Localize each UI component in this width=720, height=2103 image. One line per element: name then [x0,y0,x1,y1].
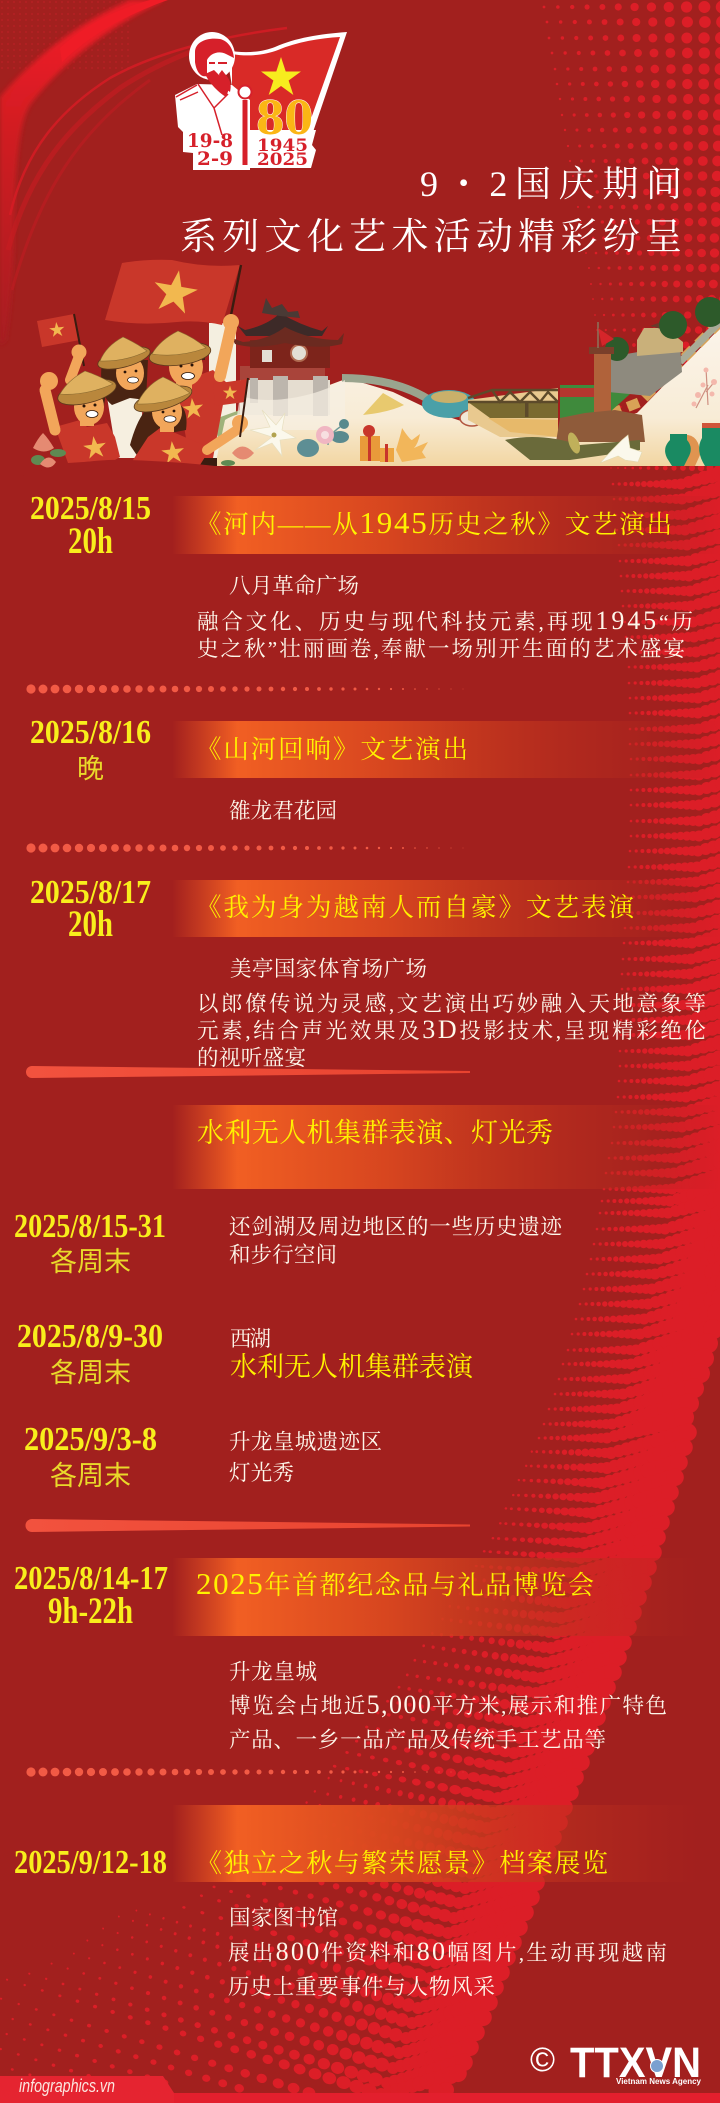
date [30,874,151,945]
divider [26,1767,463,1777]
logo: 80th anniversary emblem: 19-8 [187,130,233,152]
banner [172,496,720,554]
schedule row: Thang Long: 升龙皇城遗迹区 [229,1430,382,1454]
description: 雒龙君花园 [229,799,337,823]
schedule row: Thang Long: 2025/9/3-8 [24,1421,157,1458]
person: boy with raised fist [40,371,120,463]
event 6: archive exhibition [14,1805,720,1999]
description: 八月革命广场 [229,574,359,598]
description: 的视听盛宴 [197,1046,306,1070]
gifts, conical hat and lotus [360,390,484,462]
banner [172,1558,720,1636]
event 2: echoes of mountains and rivers [30,714,720,823]
schedule row: Hoan Kiem: 2025/8/15-31 [14,1208,166,1245]
divider [26,843,463,853]
date [30,714,151,784]
schedule row: Hoan Kiem: 各周末 [50,1247,131,1277]
schedule row: Hoan Kiem: 和步行空间 [229,1243,337,1267]
schedule row: Thang Long [24,1421,382,1491]
schedule row: Thang Long: 各周末 [50,1461,131,1491]
lily and lotus flowers [250,410,349,457]
person: man with raised flag [148,314,239,466]
person: girl in front [130,377,248,465]
banner [172,1105,720,1189]
heading: 水利无人机集群表演、灯光秀 [197,1118,553,1148]
date [14,1560,168,1632]
date: 2025/8/17 [30,874,151,911]
pagoda [232,298,345,430]
description: 博览会占地近5,000平方米,展示和推广特色 [229,1690,667,1719]
illustration: flag-waving crowd [22,260,260,480]
divider [26,1066,470,1078]
footer band [0,2076,720,2103]
description: 史之秋”壮丽画卷,奉献一场别开生面的艺术盛宴 [197,637,685,661]
date: 2025/8/15 [30,490,151,527]
schedule row: Hoan Kiem [14,1208,562,1277]
description: 产品、一乡一品产品及传统手工艺品等 [229,1728,606,1752]
date: 2025/8/14-17 [14,1560,168,1597]
banner [172,880,720,937]
schedule row: Hoan Kiem: 还剑湖及周边地区的一些历史遗迹 [229,1215,562,1239]
title [180,164,682,258]
description: 升龙皇城 [229,1660,317,1684]
description [197,957,706,1070]
logo: 80th anniversary emblem: 1945 [257,136,308,156]
description: 展出800件资料和80幅图片,生动再现越南 [228,1937,667,1966]
description: 融合文化、历史与现代科技元素,再现1945“历 [197,606,693,635]
logo: TTXVN copyright: © [530,2041,555,2079]
schedule row: West Lake [17,1318,475,1388]
schedule row: Thang Long: 灯光秀 [229,1461,294,1485]
banner [172,1805,720,1882]
date: 2025/9/12-18 [14,1844,167,1881]
red wave below crowd [22,460,260,480]
description [229,1660,667,1752]
logo: 80th anniversary emblem [175,32,347,170]
schedule row: West Lake: 2025/8/9-30 [17,1318,163,1355]
date: 晚 [77,754,104,784]
description: 国家图书馆 [229,1906,338,1930]
event 3: proud to be Vietnamese [30,874,720,1070]
event 1: Hanoi from autumn 1945 [30,490,720,661]
small flag right [213,378,248,437]
schedule row: West Lake: 水利无人机集群表演 [230,1352,475,1382]
event 4: water drone shows and light shows [14,1105,720,1491]
top-left red swooshes [0,0,287,345]
description: 元素,结合声光效果及3D投影技术,呈现精彩绝伦 [197,1015,706,1044]
date: 2025/8/16 [30,714,151,751]
small flag left [37,314,84,366]
heading: 《独立之秋与繁荣愿景》档案展览 [196,1849,608,1878]
heading: 2025年首都纪念品与礼品博览会 [196,1566,594,1601]
divider [26,684,463,694]
date: 20h [68,904,113,945]
description: 美亭国家体育场广场 [230,957,427,981]
schedule row: West Lake: 西湖 [230,1327,271,1351]
heading: 《我为身为越南人而自豪》文艺表演 [196,893,636,922]
person: woman in ao dai [70,337,152,458]
source link: infographics.vn [19,2076,115,2096]
title: 系列文化艺术活动精彩纷呈 [180,216,682,258]
pink lotus flowers and leaves [31,433,254,468]
banner illustration: landscape [209,297,720,466]
title: 9・2国庆期间 [420,164,682,204]
schedule row: West Lake: 各周末 [50,1358,131,1388]
date [30,490,151,562]
logo: 80th anniversary emblem: 2-9 [197,148,233,170]
bridge [468,388,558,437]
description [197,574,693,661]
logo: 80th anniversary emblem: 80 [256,91,313,145]
logo: 80th anniversary emblem: 2025 [257,150,308,170]
divider [26,1519,470,1532]
logo: TTXVN copyright: Vietnam News Agency [616,2076,701,2086]
description: 历史上重要事件与人物风采 [228,1975,495,1999]
description [228,1906,667,1999]
date: 20h [68,521,113,562]
Hanoi flag tower and citadel [505,297,720,460]
banner [172,721,720,778]
large national flag [105,260,241,330]
heading: 《山河回响》文艺演出 [196,735,468,764]
logo: TTXVN copyright: TTXVN [570,2039,701,2087]
description: 以郎僚传说为灵感,文艺演出巧妙融入天地意象等 [197,992,706,1016]
lily, plum blossom and vases [566,368,720,466]
event 5: souvenir and gift fair [14,1558,720,1752]
heading: 《河内——从1945历史之秋》文艺演出 [196,505,672,540]
date: 9h-22h [48,1591,133,1632]
